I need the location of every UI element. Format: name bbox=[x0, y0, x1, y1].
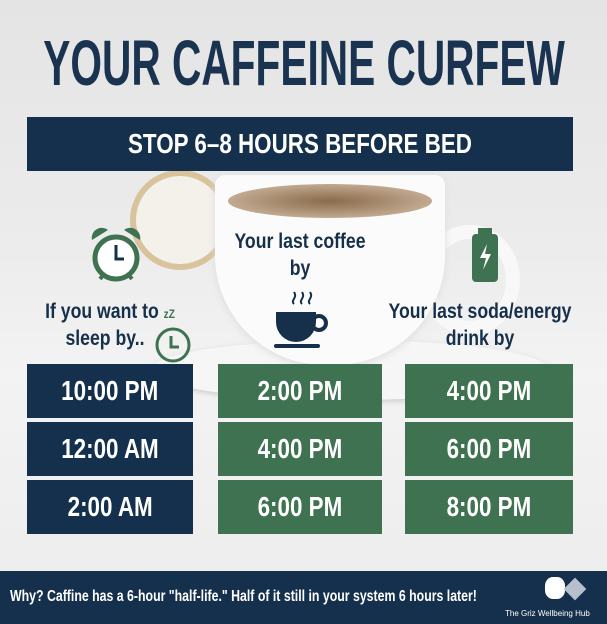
label: last coffee bbox=[234, 230, 366, 280]
label: sleep by bbox=[45, 300, 175, 350]
icon: energy can bbox=[472, 228, 498, 282]
table: times: 10:00 PM bbox=[61, 375, 159, 406]
title: YOUR CAFFEINE CURFEW bbox=[43, 27, 565, 99]
table: times: 4:00 PM bbox=[447, 375, 531, 406]
table: times: 2:00 AM bbox=[67, 491, 153, 522]
table: times: 4:00 PM bbox=[258, 433, 342, 464]
table: times: 2:00 PM bbox=[258, 375, 342, 406]
icon: alarm clock bbox=[92, 228, 140, 282]
table: times bbox=[27, 364, 573, 534]
table: times: 12:00 AM bbox=[61, 433, 159, 464]
label: sleep by: If you want to zZ bbox=[45, 300, 175, 323]
icon: small clock bbox=[156, 328, 190, 362]
table: times: 6:00 PM bbox=[258, 491, 342, 522]
table: times: 8:00 PM bbox=[447, 491, 531, 522]
banner bbox=[27, 117, 573, 171]
logo bbox=[505, 577, 590, 618]
label: last coffee: by bbox=[290, 257, 310, 280]
label: last coffee: Your last coffee bbox=[234, 230, 366, 253]
footer bbox=[0, 571, 607, 624]
label: sleep by: sleep by.. bbox=[65, 327, 145, 350]
logo: The Griz Wellbeing Hub bbox=[505, 609, 590, 618]
banner: STOP 6–8 HOURS BEFORE BED bbox=[128, 128, 472, 159]
label: last soda: Your last soda/energy bbox=[388, 300, 571, 323]
table: times: 6:00 PM bbox=[447, 433, 531, 464]
icon: coffee cup bbox=[274, 292, 328, 348]
label: last soda bbox=[388, 300, 572, 350]
label: last soda: drink by bbox=[446, 327, 514, 350]
footer text: Why? Caffine has a 6-hour "half-life." Half of it still in your system 6 hours later! bbox=[10, 588, 477, 605]
